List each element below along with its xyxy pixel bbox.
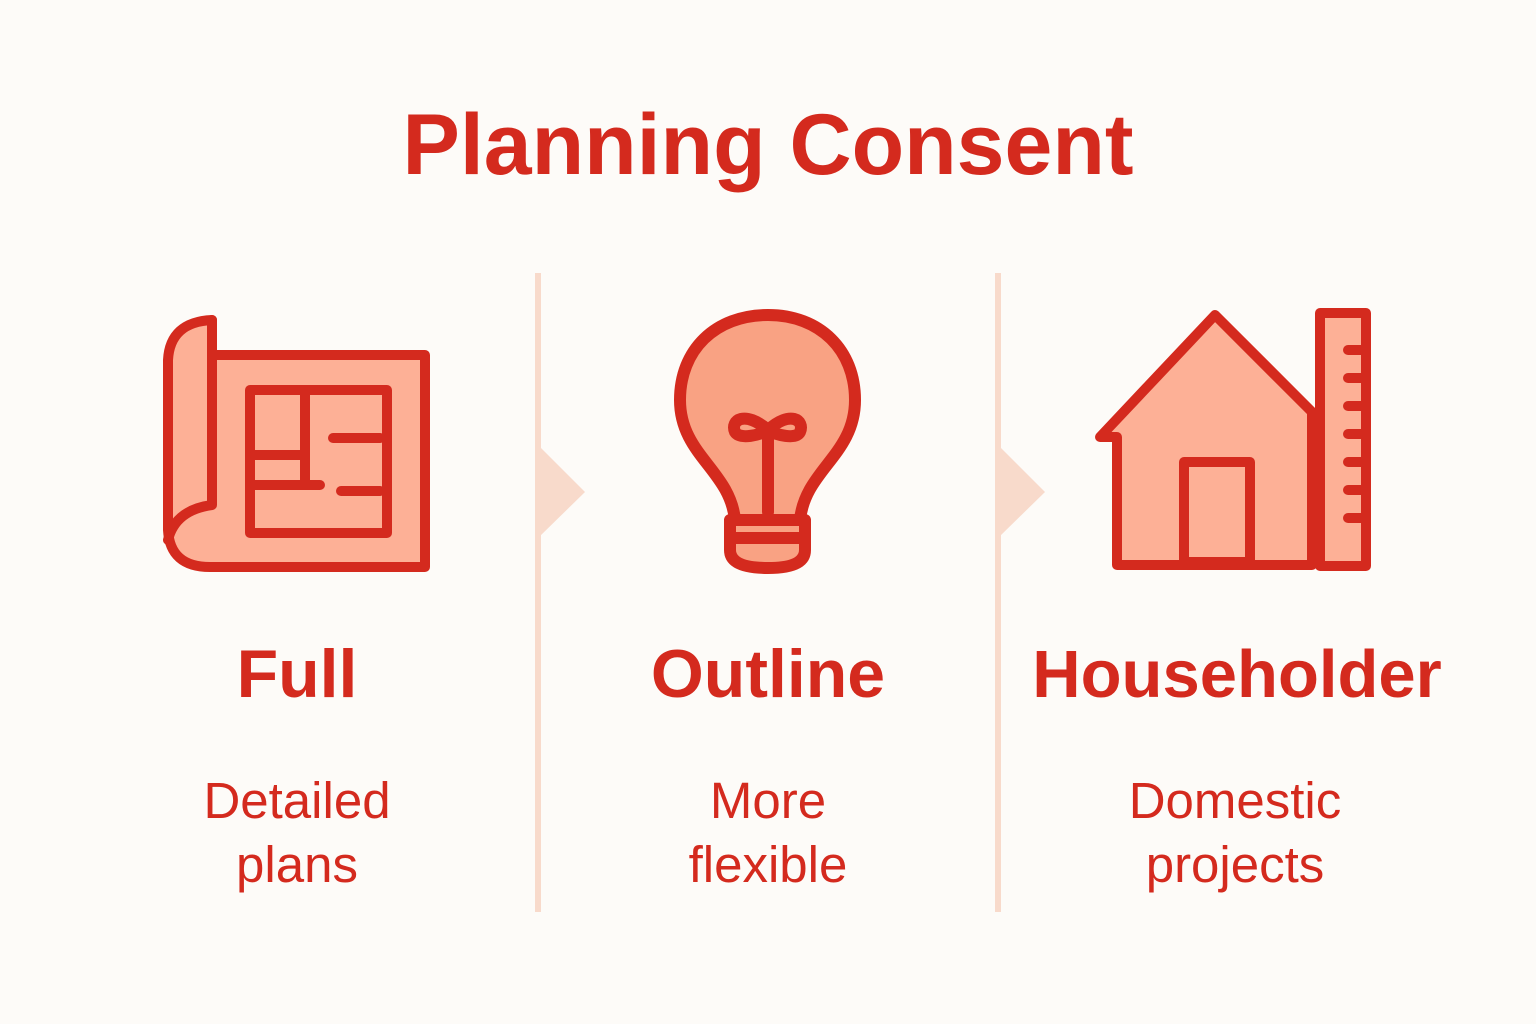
heading: Householder: Householder bbox=[1032, 637, 1442, 712]
divider arrow 2 bbox=[995, 273, 1045, 912]
text: Householder description: Domestic bbox=[1129, 772, 1341, 829]
title: Planning Consent bbox=[402, 97, 1134, 193]
heading: Full: Full bbox=[237, 636, 357, 712]
icon: house with ruler bbox=[1100, 313, 1366, 566]
divider arrow 1 bbox=[535, 273, 585, 912]
heading: Outline: Outline bbox=[651, 636, 885, 712]
text: Full description: plans bbox=[236, 836, 358, 893]
icon: lightbulb bbox=[680, 315, 855, 568]
text: Full description: Detailed bbox=[203, 772, 391, 829]
text: Householder description: projects bbox=[1146, 836, 1324, 893]
text: Outline description: flexible bbox=[689, 836, 847, 893]
text: Outline description: More bbox=[710, 772, 826, 829]
icon: blueprint bbox=[168, 320, 425, 567]
